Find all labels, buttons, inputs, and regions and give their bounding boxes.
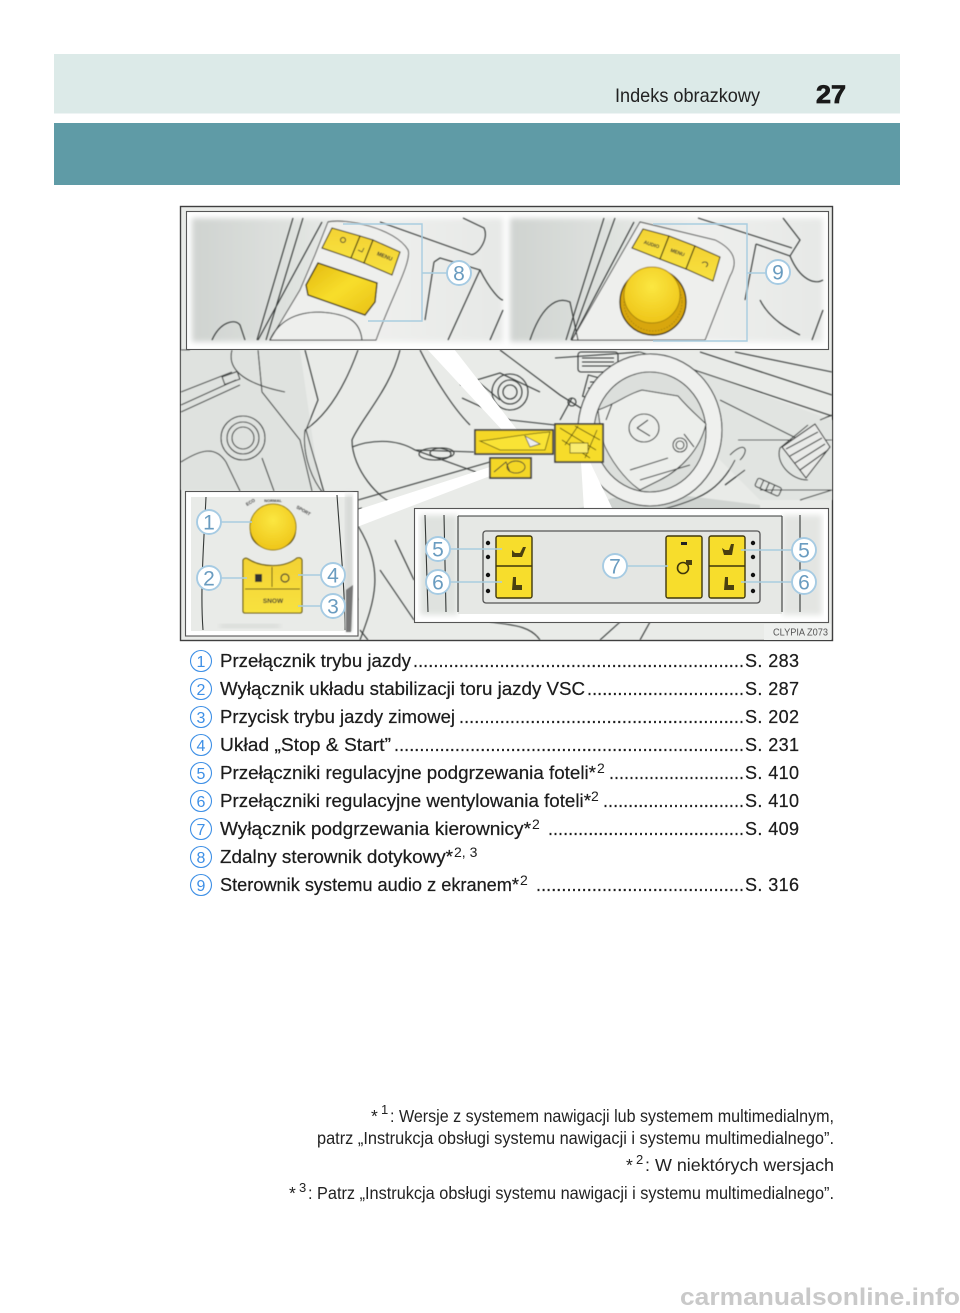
numbers 5 to 7: 7	[609, 556, 621, 578]
legend row 2: 2	[197, 682, 206, 699]
bracket and number 9	[653, 224, 790, 341]
legend row 4	[190, 734, 799, 756]
touch pad	[306, 263, 377, 315]
watermark: carmanualsonline.info	[680, 1284, 960, 1311]
legend row 9: S. 316	[745, 875, 799, 895]
wheel heater switch	[666, 536, 702, 598]
legend row 1: S. 283	[745, 651, 799, 671]
legend row 7: 2	[532, 816, 540, 832]
switch plate	[483, 531, 760, 603]
zone: climate switches	[555, 424, 603, 462]
footnote 1: : Wersje z systemem nawigacji lub systemem multimedialnym,	[390, 1106, 834, 1126]
bracket and number 9: 9	[772, 262, 784, 284]
panel: audio controller	[510, 218, 823, 342]
legend row 5: ...........................	[609, 763, 744, 783]
illustration: car interior	[180, 206, 832, 640]
right seat switches	[709, 536, 745, 598]
legend row 6: ............................	[603, 791, 744, 811]
numbers 5 to 7: 6	[798, 572, 810, 594]
legend row 4: Układ „Stop & Start”	[220, 735, 391, 755]
legend row 3: ........................................................	[459, 707, 744, 727]
legend row 8: Zdalny sterownik dotykowy*	[220, 847, 453, 867]
legend row 4: 4	[197, 738, 206, 755]
bracket and number 8: 8	[453, 262, 465, 286]
numbers 1 to 4: 1	[203, 512, 215, 534]
footnote 2: *	[626, 1155, 633, 1175]
highlighted control zones	[475, 424, 603, 478]
footnote 1: *	[371, 1106, 378, 1126]
legend row 6: 6	[197, 794, 206, 811]
legend row 8: 2, 3	[454, 844, 478, 860]
legend row 6	[190, 788, 799, 812]
audio buttons	[632, 229, 720, 281]
legend row 9: 2	[520, 872, 528, 888]
legend row 2: ...............................	[587, 679, 744, 699]
interior line art	[181, 350, 832, 640]
footnote 3: : Patrz „Instrukcja obsługi systemu nawigacji i systemu multimedialnego”.	[308, 1183, 834, 1203]
legend row 5: 5	[197, 766, 206, 783]
remote touch buttons: MENU	[376, 251, 393, 263]
audio buttons: MENU	[669, 248, 686, 259]
legend row 1: Przełącznik trybu jazdy	[220, 651, 411, 671]
drive mode knob: NORMAL	[264, 498, 282, 503]
legend row 1	[190, 650, 799, 672]
legend row 1: .................................................................	[413, 651, 744, 671]
legend row 7: Wyłącznik podgrzewania kierownicy*	[220, 819, 531, 839]
legend row 3: 3	[197, 710, 206, 727]
drive mode knob: ECO	[245, 497, 256, 507]
footnote 1: patrz „Instrukcja obsługi systemu nawigacji i systemu multimedialnego”.	[317, 1128, 834, 1148]
numbers 1 to 4: 4	[327, 564, 339, 588]
legend row 5: 2	[597, 760, 605, 776]
panel: remote touch	[192, 218, 503, 342]
footnote 2: : W niektórych wersjach	[645, 1155, 834, 1175]
legend row 3	[190, 706, 799, 728]
legend row 2: S. 287	[745, 679, 799, 699]
drive mode knob	[245, 497, 312, 550]
inset frame: upper controllers	[186, 212, 828, 350]
numbers 5 to 7: 6	[432, 572, 444, 594]
legend row 5	[190, 760, 799, 784]
legend row 7	[190, 816, 799, 840]
drive mode buttons	[243, 558, 302, 613]
numbers 1 to 4: 3	[327, 596, 339, 618]
numbers 1 to 4	[197, 510, 345, 618]
audio buttons: AUDIO	[643, 240, 660, 250]
legend row 6: 2	[591, 788, 599, 804]
legend row 7: 7	[197, 822, 206, 839]
legend row 2: Wyłącznik układu stabilizacji toru jazdy VSC	[220, 679, 585, 699]
legend row 6: S. 410	[745, 791, 799, 811]
callout wedges	[357, 349, 613, 527]
numbers 5 to 7	[426, 537, 816, 594]
legend row 6: Przełączniki regulacyjne wentylowania foteli*	[220, 791, 591, 811]
zone: touch pad	[475, 430, 553, 454]
page number: 27	[816, 81, 846, 109]
footnotes	[289, 1102, 834, 1203]
numbers 5 to 7: 5	[432, 538, 444, 562]
legend row 4: .....................................................................	[394, 735, 744, 755]
footnote 3: *	[289, 1183, 296, 1203]
legend list	[190, 650, 799, 896]
legend row 7: S. 409	[745, 819, 799, 839]
label: illustration code	[764, 624, 831, 640]
steering wheel	[578, 354, 722, 506]
audio knob	[620, 267, 686, 335]
footnote 2: 2	[636, 1152, 643, 1167]
section title: Indeks obrazkowy	[615, 85, 760, 107]
label: illustration code: CLYPIA Z073	[773, 626, 828, 638]
panel: seat and wheel heater switches	[414, 508, 828, 622]
teal section band	[54, 123, 900, 185]
legend row 9: 9	[197, 878, 206, 895]
header band	[54, 54, 900, 114]
footnote 3: 3	[299, 1180, 306, 1195]
legend row 1: 1	[197, 654, 206, 671]
legend row 8: 8	[197, 850, 206, 867]
legend row 9	[190, 872, 799, 896]
panel: drive mode controls	[186, 492, 358, 636]
drive mode buttons: SNOW	[263, 598, 284, 605]
footnote 1: 1	[381, 1102, 388, 1117]
drive mode knob: SPORT	[296, 505, 312, 517]
footnote 1	[317, 1102, 834, 1148]
legend row 3: Przycisk trybu jazdy zimowej	[220, 707, 455, 727]
bracket and number 8	[343, 224, 471, 321]
right air vent	[779, 424, 830, 480]
legend row 9: .........................................	[536, 875, 744, 895]
zone: drive mode	[490, 458, 531, 478]
remote touch buttons	[322, 228, 400, 275]
left seat switches	[496, 536, 532, 598]
legend row 5: Przełączniki regulacyjne podgrzewania foteli*	[220, 763, 596, 783]
numbers 5 to 7: 5	[798, 540, 810, 562]
legend row 3: S. 202	[745, 707, 799, 727]
legend row 5: S. 410	[745, 763, 799, 783]
numbers 1 to 4: 2	[203, 568, 215, 590]
legend row 2	[190, 678, 799, 700]
legend row 8	[190, 844, 478, 868]
legend row 4: S. 231	[745, 735, 799, 755]
indicator dots	[486, 541, 755, 593]
legend row 9: Sterownik systemu audio z ekranem*	[220, 875, 519, 895]
legend row 7: .......................................	[548, 819, 744, 839]
